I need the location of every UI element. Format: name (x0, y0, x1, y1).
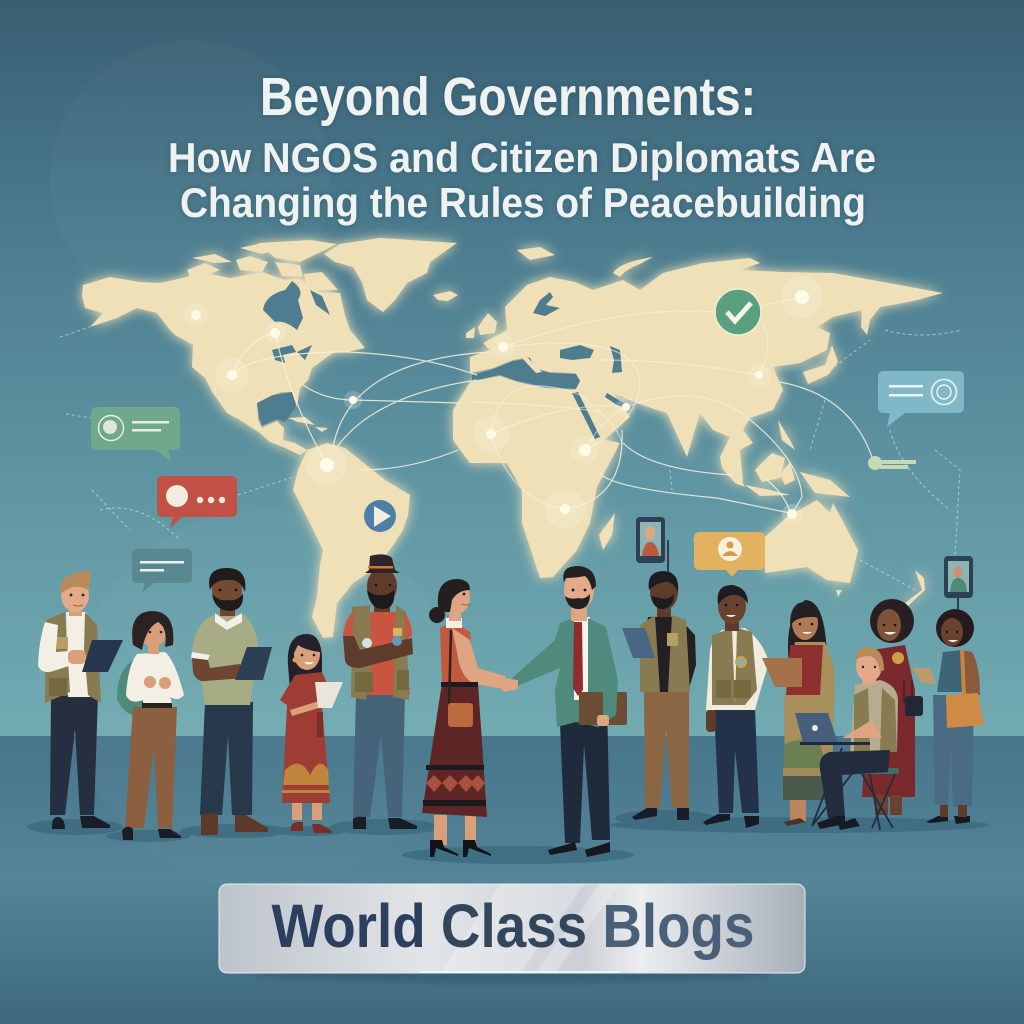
Svalbard (517, 247, 555, 260)
South America (293, 443, 410, 638)
person 11: woman with curly hair in maroon dress (862, 599, 923, 815)
Japan (803, 345, 838, 384)
Eurasia (470, 258, 943, 483)
background floor (0, 736, 1024, 1024)
speech bubble: yellow (694, 532, 765, 577)
Caribbean (288, 417, 328, 432)
New Zealand (905, 570, 925, 606)
icon: play button (364, 500, 396, 532)
person 3: man in sage shirt with clipboard (191, 568, 272, 835)
title (168, 67, 876, 226)
speech bubble: blue (878, 371, 964, 427)
person 9: man in cream shirt and vest (703, 585, 769, 828)
faint arcs on land (470, 297, 802, 509)
Italy peninsula (522, 358, 542, 373)
UK and Ireland (478, 313, 497, 335)
title: Beyond Governments: (260, 67, 756, 127)
icon: pale green key marker (868, 456, 916, 470)
world map (82, 238, 943, 638)
background wall (0, 0, 1024, 736)
person 8: man in black sleeves with clipboard and phone (622, 517, 696, 820)
Iceland (433, 291, 458, 301)
Canadian arctic islands (187, 240, 338, 290)
Novaya Zemlya (613, 257, 653, 277)
person 1: man with vest and clipboard (38, 571, 123, 829)
person 7: man in green jacket with folder (498, 566, 627, 857)
dashed routes (60, 327, 962, 590)
Africa (453, 376, 620, 578)
person 13: woman with orange bag and phone (912, 556, 984, 824)
Australia (765, 500, 858, 583)
faint decorative circles (50, 40, 455, 890)
ground shadows (27, 810, 990, 864)
Indonesia and Philippines (720, 420, 850, 497)
banner: World Class Blogs (219, 884, 805, 983)
person 4: girl in red dress with paper (280, 634, 343, 833)
person 6: woman in long skirt shaking hands (422, 579, 510, 857)
North America (82, 272, 365, 455)
network arcs (232, 333, 872, 514)
banner: World Class Blogs: World Class Blogs (272, 892, 754, 960)
icon: green check badge (715, 289, 761, 335)
speech bubble: red (157, 476, 237, 528)
person 5: man with hat and crossed arms (343, 554, 417, 829)
speech bubble: green (91, 407, 180, 462)
speech bubble: teal (132, 549, 192, 592)
person 10: woman in patterned robe with tablet (762, 600, 835, 826)
Madagascar (599, 513, 615, 550)
person 12: seated man with laptop (795, 647, 899, 830)
Greenland (324, 238, 457, 312)
title: Changing the Rules of Peacebuilding (180, 179, 866, 226)
inland seas on map (257, 281, 627, 439)
person 2: woman with green bag (117, 611, 184, 840)
Tasmania (836, 590, 842, 597)
glowing network nodes (184, 276, 823, 529)
title: How NGOS and Citizen Diplomats Are (168, 134, 876, 181)
